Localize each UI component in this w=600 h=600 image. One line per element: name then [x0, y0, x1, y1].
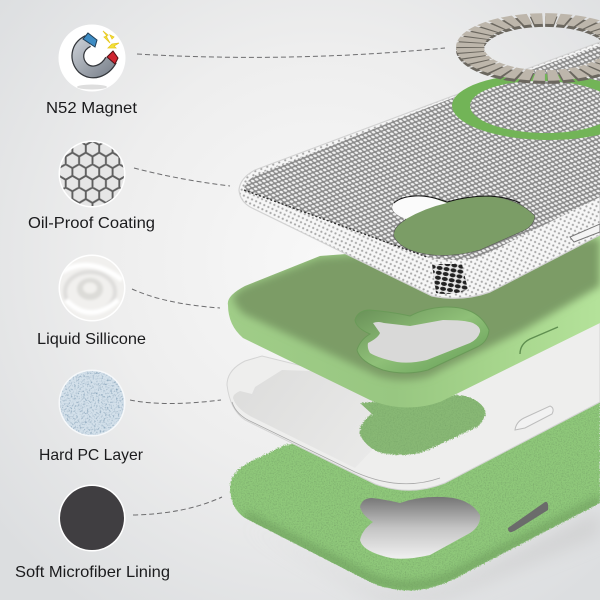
green adhesive ring [451, 72, 600, 142]
icon: horseshoe magnet [58, 24, 126, 92]
label: Hard PC Layer: Hard PC Layer [39, 447, 144, 464]
item: Oil-Proof Coating [28, 140, 155, 232]
label: Oil-Proof Coating: Oil-Proof Coating [28, 215, 155, 232]
layer: microfiber lining case [230, 400, 600, 600]
layer: liquid silicone case [228, 235, 600, 408]
item: Soft Microfiber Lining [15, 484, 170, 581]
silicone side button [520, 327, 558, 354]
item: Hard PC Layer [39, 370, 144, 464]
icon: honeycomb coating [58, 140, 126, 208]
silicone camera ring [355, 307, 489, 373]
item: Liquid Sillicone [37, 254, 146, 348]
icon: liquid swirl [58, 254, 126, 322]
clear case camera cutout [360, 395, 485, 455]
layer: clear hard PC case [227, 320, 600, 490]
label: N52 Magnet: N52 Magnet [46, 100, 138, 117]
icon: PC granules [58, 370, 126, 436]
item: N52 Magnet [46, 24, 138, 117]
lining camera hole [360, 497, 480, 559]
shell corner dark reflection [432, 264, 468, 294]
shell button cutout [570, 224, 600, 242]
layer: oil-proof coating shell [239, 42, 600, 298]
lining button slot [508, 502, 548, 532]
layer: N52 magnet ring [470, 18, 600, 79]
label: Liquid Sillicone: Liquid Sillicone [37, 331, 146, 348]
label: Soft Microfiber Lining: Soft Microfiber Lining [15, 564, 170, 581]
leader lines [130, 48, 445, 515]
icon: microfiber swatch [58, 484, 126, 552]
shell camera cutout [392, 196, 535, 255]
clear case button [515, 406, 553, 430]
